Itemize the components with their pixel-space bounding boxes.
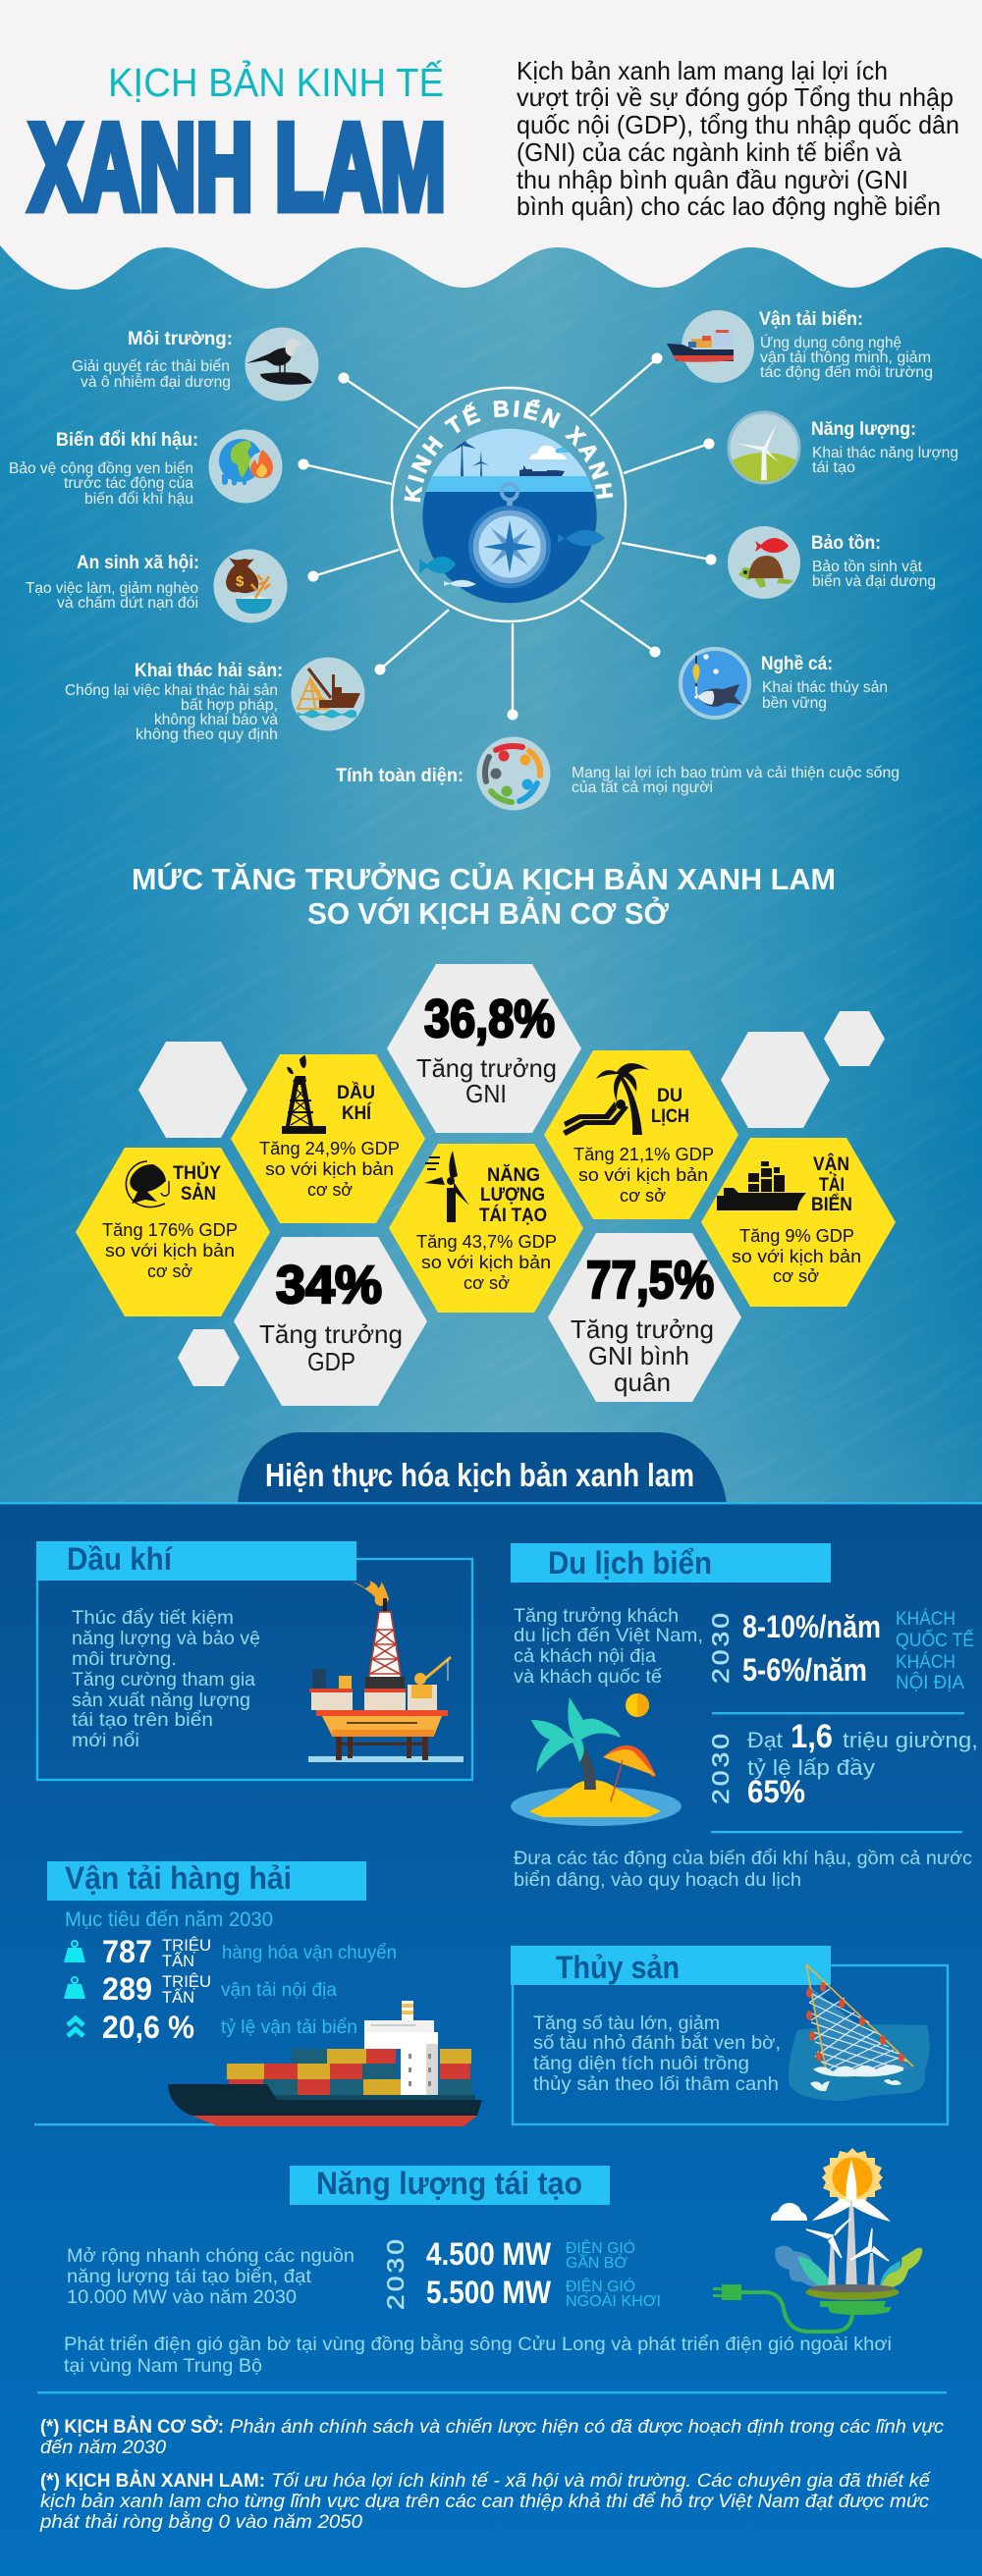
stats: tăng trưởng khách: NỘI ĐỊA (896, 1672, 964, 1693)
panel: thủy sản (511, 1946, 948, 2124)
text: biến đổi khí hậu: Bảo vệ cộng đồng ven biển (9, 459, 193, 477)
panel: du lịch biển (511, 1543, 978, 1891)
hexagon: tăng trưởng GNI bình quân: quân (614, 1368, 671, 1397)
stat: 787 triệu tấn: 787 (102, 1934, 152, 1969)
stats: tăng trưởng khách: 5-6%/năm (742, 1652, 867, 1688)
year label: 2030 (383, 2236, 409, 2310)
stats: giường: tỷ lệ lấp đầy (747, 1755, 875, 1780)
icon circle: biến đổi khí hậu (208, 430, 283, 503)
hexagon: vận tải biển: so với kịch bản (732, 1247, 861, 1266)
panel text: dầu khí: năng lượng và bảo vệ (72, 1628, 260, 1649)
hexagon: dầu khí: so với kịch bản (265, 1159, 394, 1179)
footnote: kịch bản cơ sở: (*) KỊCH BẢN CƠ SỞ: (40, 2414, 224, 2438)
hexagon: du lịch: Tăng 21,1% GDP (573, 1145, 714, 1164)
stats: tăng trưởng khách: QUỐC TẾ (896, 1630, 974, 1651)
stats: giường: 65% (747, 1774, 805, 1809)
text: an sinh xã hội: và chấm dứt nạn đói (57, 595, 198, 612)
panel: dầu khí: Dầu khí (67, 1541, 173, 1577)
text: khai thác hải sản: không theo quy định (136, 726, 278, 743)
hexagon: tăng trưởng GDP (234, 1237, 427, 1406)
header: intro paragraph (517, 56, 959, 221)
icon: container ship (168, 2001, 482, 2126)
icon circle: vận tải biển (667, 310, 754, 383)
panel text: thủy sản: Tăng số tàu lớn, giảm (533, 2012, 720, 2034)
stats: giường: triệu giường, (843, 1728, 978, 1752)
stats: tăng trưởng khách: KHÁCH (896, 1609, 955, 1630)
icon: palm and sun lounger (563, 1063, 649, 1136)
text: môi trường: Giải quyết rác thải biển (72, 357, 230, 375)
text: nghề cá (761, 654, 888, 712)
icon circle: tính toàn diện (477, 736, 550, 811)
hexagon: vận tải biển (701, 1138, 896, 1307)
footnote: kịch bản cơ sở: đến năm 2030 (40, 2437, 166, 2458)
text: môi trường: Môi trường: (128, 329, 233, 349)
icon circle: an sinh xã hội (214, 550, 287, 622)
footnote: kịch bản xanh lam (39, 2469, 931, 2533)
footnote: kịch bản xanh lam: Tối ưu hóa lợi ích kinh tế - xã hội và môi trường. Các chuyên gia đã thiết kế (271, 2470, 931, 2492)
text: an sinh xã hội: Tạo việc làm, giảm nghèo (26, 580, 198, 597)
text: khai thác hải sản: không khai báo và (154, 712, 278, 728)
hexagon: tăng trưởng GDP: GDP (307, 1347, 355, 1376)
hexagon: dầu khí: KHÍ (342, 1102, 372, 1124)
emblem ring text: KINH TẾ BIỂN XANH (405, 399, 613, 503)
text: tính toàn diện: Mang lại lợi ích bao trùm và cải thiện cuộc sống (572, 765, 900, 781)
text: vận tải biển: Ứng dụng công nghệ (760, 333, 901, 351)
icon circle: an sinh xã hội: $ (236, 573, 245, 590)
text: môi trường: và ô nhiễm đại dương (81, 372, 231, 391)
text: mở rộng (67, 2245, 355, 2308)
panel text: dầu khí: mới nổi (72, 1730, 139, 1751)
text: khai thác hải sản: Khai thác hải sản: (135, 661, 283, 681)
header: intro paragraph: thu nhập bình quân đầu người (GNI (517, 165, 908, 194)
text: biến đổi khí hậu: biến đổi khí hậu (84, 490, 193, 508)
year label: 2030 (708, 1610, 735, 1684)
panel: dầu khí (36, 1541, 472, 1780)
text: mở rộng: năng lượng tái tạo biển, đạt (67, 2266, 312, 2287)
stat: 787 triệu tấn: TẤN (162, 1952, 194, 1970)
hexagon: năng lượng tái tạo (389, 1144, 583, 1313)
text: phát triển điện gió: tại vùng Nam Trung Bộ (64, 2355, 262, 2377)
text: vận tải biển: vận tải thông minh, giảm (760, 349, 931, 366)
text: bảo tồn: Bảo tồn: (811, 533, 881, 554)
text: biến đổi khí hậu du lịch: biển dâng, vào quy hoạch du lịch (514, 1869, 801, 1891)
compass (470, 484, 549, 586)
text: năng lượng (811, 419, 958, 476)
stat: 787 triệu tấn: hàng hóa vận chuyển (222, 1943, 397, 1963)
icon circle: môi trường (246, 328, 318, 401)
hexagon: du lịch: LỊCH (651, 1106, 689, 1127)
hexagon: vận tải biển: TẢI (819, 1174, 845, 1196)
text: mở rộng: Mở rộng nhanh chóng các nguồn (67, 2245, 355, 2267)
footnote: kịch bản cơ sở: Phản ánh chính sách và chiến lược hiện có đã được hoạch định trong các lĩnh vực (230, 2416, 944, 2438)
stats: điện gió: NGOÀI KHƠI (566, 2291, 661, 2310)
text: khai thác hải sản (65, 661, 283, 743)
hexagon: thủy sản: Tăng 176% GDP (102, 1220, 238, 1240)
stats: giường: 1,6 (791, 1718, 833, 1755)
hexagon: tăng trưởng GDP: Tăng trưởng (259, 1319, 403, 1349)
icon: offshore oil rig (308, 1581, 464, 1762)
section heading tab: hiện thực hóa: Hiện thực hóa kịch bản xanh lam (265, 1457, 694, 1493)
panel text: thủy sản: tăng diện tích nuôi trồng (533, 2053, 749, 2074)
stats: điện gió: GẦN BỜ (566, 2253, 627, 2272)
hexagon: vận tải biển: BIỂN (811, 1194, 852, 1215)
stat: 289 triệu tấn: vận tải nội địa (221, 1980, 337, 2001)
text: tăng trưởng khách: du lịch đến Việt Nam, (514, 1625, 703, 1646)
text: vận tải biển: tác động đến môi trường (760, 364, 933, 381)
stats: điện gió: 4.500 MW (426, 2236, 552, 2272)
footnote: kịch bản xanh lam: (*) KỊCH BẢN XANH LAM: (40, 2469, 265, 2492)
stat: 20,6 % (68, 2010, 357, 2045)
footnote: kịch bản xanh lam: phát thải ròng bằng 0 vào năm 2050 (39, 2510, 362, 2533)
text: nghề cá: Khai thác thủy sản (762, 679, 888, 696)
hexagon: du lịch: DU (657, 1086, 682, 1106)
icon circle: khai thác hải sản (291, 658, 365, 730)
hexagon: thủy sản: cơ sở (147, 1261, 192, 1281)
stats: tăng trưởng khách (742, 1609, 974, 1693)
text: tính toàn diện (336, 765, 900, 796)
hexagon: dầu khí: DẦU (337, 1082, 375, 1103)
header: intro paragraph: bình quân) cho các lao động nghề biển (517, 191, 941, 221)
icon: fishing net (789, 1964, 930, 2101)
hexagon: dầu khí: cơ sở (307, 1180, 353, 1200)
header: title (29, 60, 446, 236)
icon: wind turbine (424, 1151, 469, 1222)
section heading: mức tăng trưởng: MỨC TĂNG TRƯỞNG CỦA KỊCH BẢN XANH LAM (132, 861, 836, 896)
text: biến đổi khí hậu: Biến đổi khí hậu: (56, 430, 198, 451)
header: intro paragraph: quốc nội (GDP), tổng thu nhập quốc dân (517, 110, 959, 139)
connector lines (299, 353, 717, 721)
panel: vận tải hàng hải: Vận tải hàng hải (65, 1860, 292, 1896)
text: năng lượng: Khai thác năng lượng (812, 445, 958, 461)
panel text: dầu khí: Tăng cường tham gia (72, 1669, 255, 1690)
text: biến đổi khí hậu du lịch: Đưa các tác động của biến đổi khí hậu, gồm cả nước (514, 1848, 972, 1869)
text: biến đổi khí hậu du lịch (514, 1848, 972, 1891)
stats: tăng trưởng khách: 8-10%/năm (742, 1609, 881, 1644)
icon circle: năng lượng (729, 412, 799, 483)
text: an sinh xã hội (26, 553, 199, 612)
text: tăng trưởng khách (514, 1605, 703, 1688)
icon: fish on hook (126, 1161, 169, 1208)
text: khai thác hải sản: bất hợp pháp, (181, 697, 278, 714)
text: bảo tồn: biển và đại dương (812, 572, 936, 590)
footnote: kịch bản xanh lam: kịch bản xanh lam cho từng lĩnh vực dựa trên các can thiệp khả thi để hỗ trợ Việt Nam đạt được mức (40, 2490, 929, 2512)
stats: giường (747, 1718, 978, 1809)
text: vận tải biển: Vận tải biển: (759, 309, 863, 330)
header: intro paragraph: vượt trội về sự đóng góp Tổng thu nhập (517, 82, 954, 112)
title line 2: XANH LAM (29, 100, 446, 236)
stat: 289 triệu tấn: TẤN (162, 1988, 194, 2007)
hexagon: tăng trưởng GNI bình quân: 77,5% (586, 1251, 714, 1310)
central emblem: kinh tế biển xanh (391, 387, 627, 622)
text: mở rộng: 10.000 MW vào năm 2030 (67, 2286, 297, 2308)
text: tăng trưởng khách: Tăng trưởng khách (514, 1605, 679, 1627)
hexagon: tăng trưởng GNI: Tăng trưởng (416, 1053, 557, 1083)
stat: 20,6 %: tỷ lệ vận tải biển (221, 2017, 357, 2038)
panel text: dầu khí: sản xuất năng lượng (72, 1690, 250, 1711)
stat: 20,6 %: 20,6 % (102, 2010, 194, 2045)
hexagon: tăng trưởng GDP: 34% (276, 1256, 382, 1315)
text: phát triển điện gió (64, 2333, 892, 2377)
hexagon: tăng trưởng GNI bình quân: GNI bình (588, 1341, 689, 1370)
hexagon: tăng trưởng GNI (387, 964, 581, 1133)
section heading: mức tăng trưởng (132, 861, 836, 931)
hexagon: năng lượng tái tạo: LƯỢNG (480, 1185, 545, 1206)
ocean background with wave edge (0, 245, 982, 1502)
text: tính toàn diện: của tất cả mọi người (572, 779, 713, 796)
hexagon: dầu khí: Tăng 24,9% GDP (259, 1139, 400, 1158)
hexagon: du lịch: cơ sở (620, 1186, 666, 1206)
panel text: thủy sản: số tàu nhỏ đánh bắt ven bờ, (533, 2031, 781, 2054)
lower section background (0, 1503, 982, 2576)
hexagon: vận tải biển: cơ sở (773, 1266, 819, 1286)
text: năng lượng: Năng lượng: (811, 419, 916, 440)
decorative hexagons (138, 1011, 885, 1386)
text: tính toàn diện: Tính toàn diện: (336, 766, 464, 786)
stats: điện gió: ĐIỆN GIÓ (566, 2277, 635, 2295)
panel: du lịch biển: Du lịch biển (548, 1545, 712, 1581)
hexagon: tăng trưởng GNI bình quân (548, 1233, 741, 1402)
panel: năng lượng tái tạo (64, 2148, 922, 2377)
icon circle: nghề cá (681, 649, 749, 718)
hexagon: năng lượng tái tạo: TÁI TẠO (479, 1205, 547, 1226)
text: bảo tồn (811, 533, 936, 590)
panel: vận tải hàng hải: Mục tiêu đến năm 2030 (65, 1908, 273, 1931)
text: vận tải biển (759, 309, 933, 381)
header: intro paragraph: Kịch bản xanh lam mang lại lợi ích (517, 56, 888, 85)
hexagon: du lịch (544, 1050, 738, 1219)
panel text: dầu khí: Thúc đẩy tiết kiệm (72, 1607, 234, 1629)
icon: wind turbines and plug (713, 2148, 922, 2332)
text: nghề cá: Nghề cá: (761, 654, 833, 674)
icon: container ship (717, 1161, 806, 1210)
text: an sinh xã hội: An sinh xã hội: (77, 553, 199, 573)
text: bảo tồn: Bảo tồn sinh vật (812, 559, 923, 575)
text: tăng trưởng khách: cả khách nội địa (514, 1645, 656, 1667)
panel text: dầu khí (72, 1607, 260, 1751)
hexagon: du lịch: so với kịch bản (578, 1165, 708, 1185)
section heading: mức tăng trưởng: SO VỚI KỊCH BẢN CƠ SỞ (307, 895, 670, 931)
text: năng lượng: tái tạo (812, 459, 855, 476)
footnote: kịch bản cơ sở (40, 2414, 944, 2458)
text: biến đổi khí hậu (9, 430, 198, 508)
stats: điện gió: 5.500 MW (426, 2275, 552, 2310)
hexagon: năng lượng tái tạo: cơ sở (464, 1273, 510, 1293)
stats: điện gió: ĐIỆN GIÓ (566, 2238, 635, 2257)
hexagon: thủy sản: SẢN (181, 1183, 216, 1205)
panel: năng lượng tái tạo: Năng lượng tái tạo (316, 2166, 582, 2201)
panel: vận tải hàng hải (34, 1860, 482, 2126)
stat: 289 triệu tấn: 289 (102, 1971, 152, 2007)
panel text: dầu khí: tái tạo trên biển (72, 1709, 213, 1731)
stats: giường: Đạt (747, 1728, 783, 1752)
hexagon: thủy sản: so với kịch bản (105, 1241, 235, 1261)
text: biến đổi khí hậu: trước tác động của (64, 475, 193, 492)
title line 1: KỊCH BẢN KINH TẾ (108, 60, 444, 105)
icon circle: bảo tồn (728, 526, 800, 599)
hexagon: năng lượng tái tạo: so với kịch bản (421, 1253, 551, 1272)
stat: 787 triệu tấn: TRIỆU (162, 1936, 211, 1955)
hexagon: năng lượng tái tạo: NĂNG (487, 1164, 540, 1186)
hexagon: tăng trưởng GNI bình quân: Tăng trưởng (571, 1315, 714, 1344)
stats: điện gió (426, 2236, 661, 2310)
hexagon: thủy sản: THỦY (173, 1162, 221, 1184)
text: tăng trưởng khách: và khách quốc tế (514, 1666, 662, 1688)
panel text: thủy sản: thủy sản theo lối thâm canh (533, 2073, 779, 2095)
panel text: dầu khí: môi trường. (72, 1648, 177, 1670)
text: nghề cá: bền vững (762, 695, 827, 712)
icon: tropical island (511, 1693, 682, 1826)
hexagon: năng lượng tái tạo: Tăng 43,7% GDP (416, 1232, 557, 1252)
hexagon: vận tải biển: Tăng 9% GDP (739, 1226, 854, 1246)
icon: oil derrick (282, 1055, 326, 1134)
panel text: thủy sản (533, 2012, 781, 2095)
fish (419, 530, 605, 587)
section heading tab: hiện thực hóa (0, 1432, 982, 1504)
text: môi trường (72, 329, 233, 391)
hexagon: tăng trưởng GNI: 36,8% (424, 990, 555, 1048)
hexagon: thủy sản (76, 1148, 270, 1316)
text: phát triển điện gió: Phát triển điện gió gần bờ tại vùng đồng bằng sông Cửu Long và phát triển điện gió ngoài khơi (64, 2333, 892, 2355)
stat: 289 triệu tấn (64, 1971, 337, 2007)
year label: 2030 (708, 1731, 735, 1804)
hexagon: tăng trưởng GNI: GNI (465, 1079, 507, 1108)
header: intro paragraph: (GNI) của các ngành kinh tế biển và (517, 137, 902, 167)
panel: thủy sản: Thủy sản (556, 1950, 680, 1985)
stat: 289 triệu tấn: TRIỆU (162, 1972, 211, 1991)
text: khai thác hải sản: Chống lại việc khai thác hải sản (65, 682, 278, 699)
stats: tăng trưởng khách: KHÁCH (896, 1652, 955, 1673)
hexagon: vận tải biển: VẬN (813, 1154, 849, 1175)
hexagon: dầu khí (231, 1054, 425, 1223)
stat: 787 triệu tấn (64, 1934, 397, 1970)
